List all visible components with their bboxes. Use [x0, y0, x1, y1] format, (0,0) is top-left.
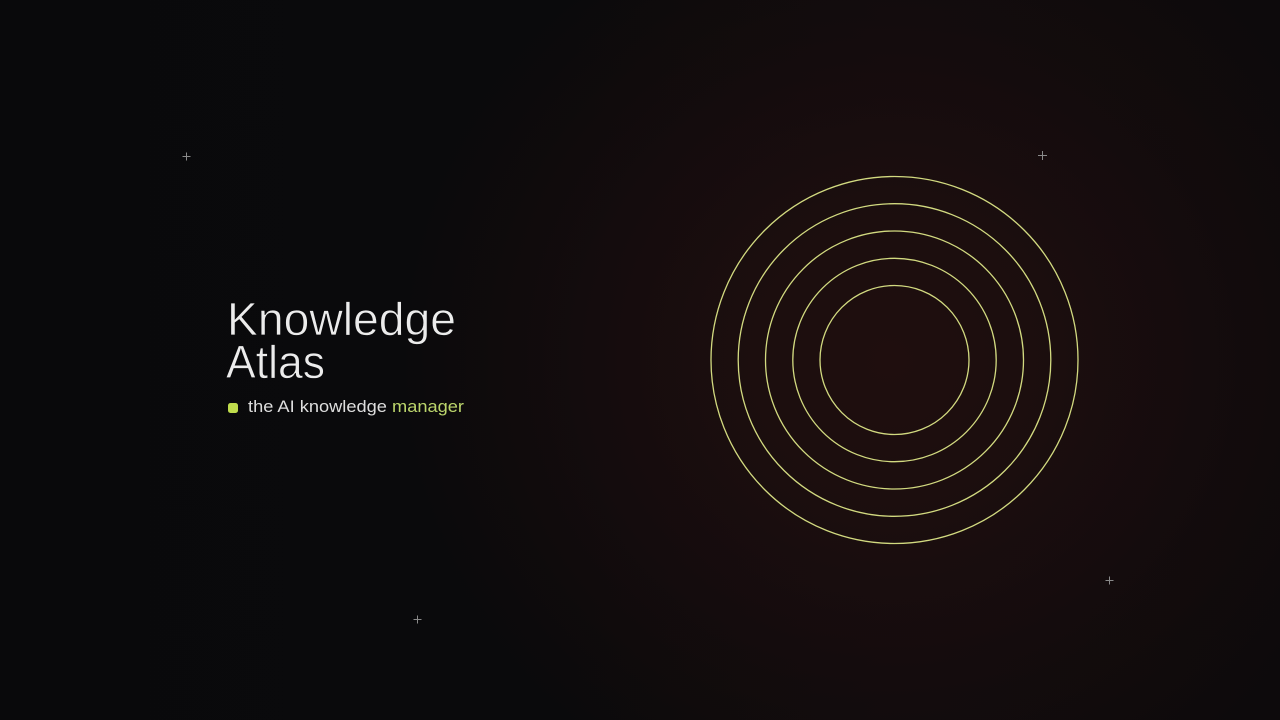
- subtitle with bullet: [228, 397, 464, 416]
- title: Knowledge Atlas: Knowledge: [227, 293, 456, 345]
- title: Knowledge Atlas: [226, 293, 456, 388]
- icon: lime square bullet: [228, 403, 238, 413]
- concentric circles: [711, 176, 1078, 544]
- decorative plus markers: [182, 151, 1114, 624]
- title: Knowledge Atlas: Atlas: [226, 336, 325, 388]
- subtitle text: the AI knowledge manager: [248, 397, 464, 416]
